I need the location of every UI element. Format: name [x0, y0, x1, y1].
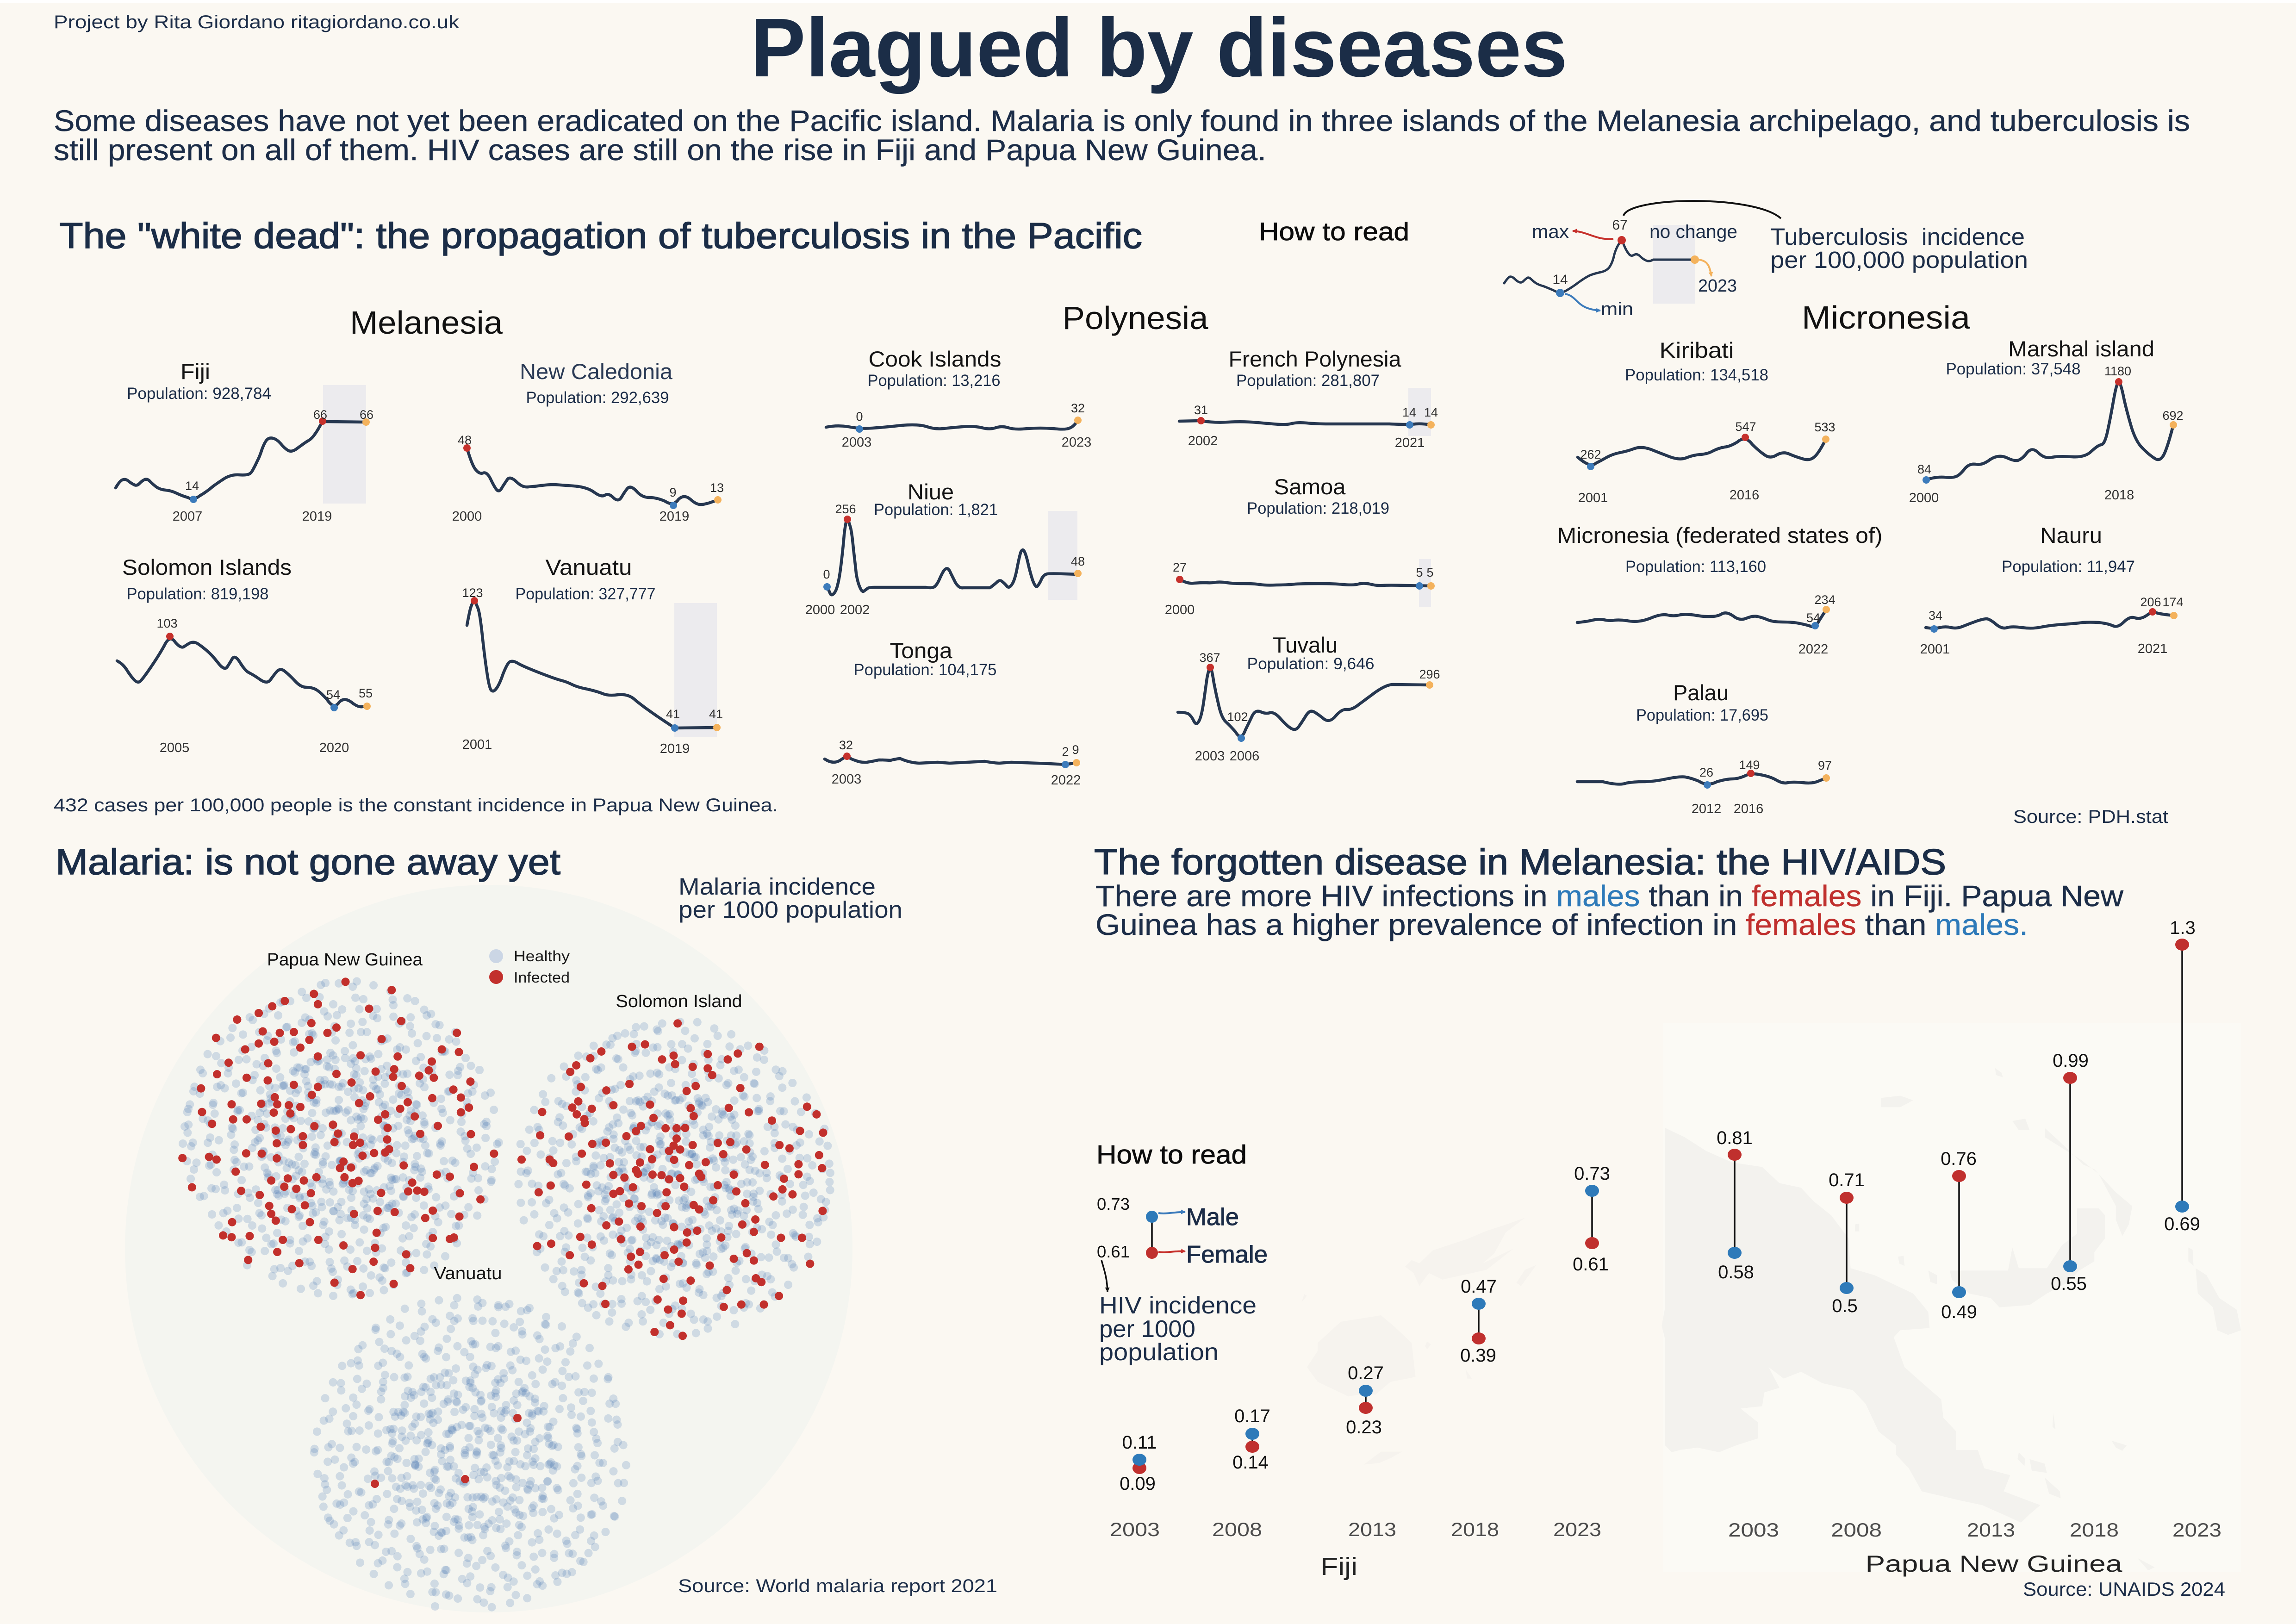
chart: Samoa: 27 [1173, 560, 1187, 574]
dot cluster: Solomon Island: Solomon Island [616, 992, 742, 1011]
note: Papua New Guinea incidence: 432 cases per 100,000 people is the constant incidence in Papua New Guinea. [54, 795, 778, 815]
chart: Papua New Guinea HIV incidence: 0.69 [2164, 1214, 2200, 1234]
chart: Nauru: Nauru [2040, 523, 2102, 548]
dot cluster: Vanuatu [250, 1231, 693, 1624]
chart: Fiji HIV incidence: 0.27 [1348, 1363, 1384, 1383]
chart: Marshal island: Marshal island [2008, 336, 2154, 361]
chart: Tuvalu: 296 [1419, 667, 1440, 681]
chart: Vanuatu: 2001 [462, 737, 492, 752]
chart: Fiji: Fiji [180, 359, 210, 384]
chart: Micronesia federated states: 234 [1814, 593, 1836, 607]
chart: New Caledonia [452, 359, 724, 524]
region heading: Polynesia: Polynesia [1063, 300, 1208, 336]
chart: Fiji HIV incidence: 0.47 [1461, 1276, 1497, 1297]
chart: Cook Islands [826, 347, 1091, 450]
chart: Fiji HIV incidence: 0.11 [1122, 1432, 1157, 1453]
tuberculosis unit note: Tuberculosis incidence [1770, 224, 2025, 250]
chart: Fiji HIV incidence: 0.39 [1460, 1345, 1496, 1366]
chart: Fiji HIV incidence: 0.14 [1232, 1452, 1269, 1473]
how to read HIV [1096, 1140, 1268, 1366]
chart: Palau [1577, 680, 1832, 816]
chart: Tonga: 2022 [1051, 773, 1081, 788]
chart: Vanuatu: Population: 327,777 [516, 585, 655, 603]
chart: Tonga: Tonga [890, 638, 952, 663]
how to read diagram: min [1601, 299, 1633, 319]
chart: Tonga: 2 [1062, 745, 1069, 759]
chart: Cook Islands: 32 [1071, 401, 1085, 415]
chart: Micronesia federated states: 54 [1806, 611, 1820, 625]
how to read diagram: max [1532, 222, 1569, 242]
chart: Tonga: 32 [839, 738, 853, 752]
HIV intro text: Guinea has a higher prevalence of infection in females than males. [1095, 908, 2028, 941]
chart: New Caledonia: Population: 292,639 [526, 389, 669, 407]
chart: Cook Islands: Population: 13,216 [867, 372, 1001, 390]
chart: Niue [805, 479, 1085, 617]
chart: Vanuatu: Vanuatu [545, 555, 632, 579]
chart: Samoa: 5 [1426, 566, 1434, 579]
chart: Fiji HIV incidence: 2003 [1110, 1518, 1160, 1540]
chart: Fiji: 2019 [302, 509, 332, 524]
chart: Solomon Islands: 55 [359, 686, 373, 700]
chart: Niue: 2002 [840, 603, 870, 617]
chart: Micronesia federated states: Micronesia (federated states of) [1557, 523, 1883, 548]
chart: Nauru [1920, 523, 2184, 657]
how to read HIV: Male [1186, 1204, 1239, 1231]
chart: Tonga: 9 [1072, 743, 1079, 757]
chart: Solomon Islands [117, 555, 373, 755]
how to read HIV: population [1099, 1339, 1219, 1366]
chart: Solomon Islands: Population: 819,198 [127, 585, 268, 603]
source: World malaria report: Source: World malaria report 2021 [678, 1576, 997, 1596]
chart: Papua New Guinea HIV incidence: 0.5 [1832, 1296, 1858, 1316]
chart: Papua New Guinea HIV incidence: 2003 [1728, 1519, 1779, 1541]
chart: Cook Islands: 2023 [1062, 435, 1091, 450]
region heading: Micronesia: Micronesia [1802, 299, 1970, 336]
chart: Papua New Guinea HIV incidence: 2008 [1831, 1519, 1882, 1541]
chart: Kiribati: Kiribati [1660, 338, 1734, 362]
region heading: Melanesia: Melanesia [350, 305, 503, 341]
chart: Nauru: 206 [2140, 595, 2161, 609]
chart: Solomon Islands: 54 [326, 688, 340, 702]
dot cluster: Papua New Guinea: Papua New Guinea [267, 950, 423, 970]
tuberculosis unit note [1770, 224, 2028, 273]
how to read diagram: 67 [1612, 218, 1628, 233]
how to read diagram [1504, 201, 1781, 319]
chart: Marshal island: 84 [1917, 462, 1931, 476]
chart: Kiribati: 2001 [1578, 491, 1608, 505]
chart: Vanuatu: 41 [709, 707, 723, 721]
chart: Papua New Guinea HIV incidence: 0.76 [1941, 1149, 1977, 1169]
chart: Tuvalu [1178, 633, 1440, 764]
how to read HIV: per 1000 [1099, 1316, 1195, 1343]
chart: Nauru: Population: 11,947 [2002, 558, 2135, 576]
dot cluster: Vanuatu: Vanuatu [434, 1264, 502, 1283]
chart: Papua New Guinea HIV incidence: 0.49 [1941, 1302, 1977, 1322]
chart: Marshal island: Population: 37,548 [1946, 360, 2081, 378]
chart: Fiji: 66 [360, 408, 373, 422]
chart: Micronesia federated states [1557, 523, 1883, 657]
chart: French Polynesia: 14 [1402, 405, 1416, 419]
chart: French Polynesia: French Polynesia [1228, 347, 1401, 371]
chart: Fiji: Population: 928,784 [127, 385, 271, 403]
chart: Palau: 149 [1739, 758, 1760, 772]
chart: New Caledonia: 2019 [660, 509, 689, 524]
HIV intro text [1095, 879, 2124, 941]
chart: Fiji HIV incidence: 2018 [1451, 1518, 1499, 1540]
dot cluster: Papua New Guinea [125, 924, 555, 1354]
chart: Samoa: 2000 [1165, 603, 1195, 617]
chart: French Polynesia: 31 [1194, 403, 1208, 417]
how to read HIV: How to read [1096, 1140, 1247, 1170]
chart: Vanuatu: 2019 [660, 741, 690, 756]
chart: French Polynesia: 2002 [1188, 434, 1218, 448]
chart: Vanuatu: 41 [666, 707, 680, 721]
chart: Tuvalu: 2003 [1195, 749, 1225, 764]
chart: French Polynesia [1179, 347, 1438, 450]
chart: Papua New Guinea HIV incidence [1717, 918, 2221, 1577]
how to read HIV: Female [1186, 1241, 1268, 1268]
chart: Kiribati: Population: 134,518 [1625, 366, 1768, 384]
how to read HIV: HIV incidence [1099, 1292, 1257, 1319]
chart: Tuvalu: 367 [1199, 651, 1220, 665]
chart: Cook Islands: 2003 [842, 435, 871, 450]
chart: Kiribati: 2016 [1730, 488, 1759, 503]
intro text [54, 104, 2190, 167]
malaria legend [489, 948, 570, 986]
how to read diagram: 14 [1552, 272, 1568, 287]
chart: Papua New Guinea HIV incidence: 0.55 [2051, 1274, 2087, 1294]
chart: Fiji [116, 359, 373, 524]
panel: HIV map backdrop [1663, 1023, 2241, 1572]
map: Fiji [1301, 1218, 1537, 1465]
chart: Cook Islands: Cook Islands [868, 347, 1002, 371]
panel: malaria background circle [125, 885, 852, 1612]
chart: Papua New Guinea HIV incidence: 2018 [2070, 1519, 2119, 1541]
chart: Papua New Guinea HIV incidence: 0.99 [2053, 1051, 2089, 1071]
chart: New Caledonia: 13 [710, 481, 724, 495]
chart: Solomon Islands: 103 [156, 616, 178, 630]
chart: Fiji HIV incidence: 2013 [1348, 1518, 1396, 1540]
chart: Tuvalu: 2006 [1230, 749, 1259, 764]
heading: HIV: The forgotten disease in Melanesia: the HIV/AIDS [1094, 841, 1946, 882]
chart: Kiribati: 533 [1814, 420, 1836, 434]
chart: Fiji HIV incidence: 0.17 [1234, 1406, 1270, 1426]
dot cluster: Solomon Island [451, 957, 894, 1400]
intro text: still present on all of them. HIV cases are still on the rise in Fiji and Papua New Guinea. [54, 133, 1266, 167]
chart: French Polynesia: 2021 [1395, 436, 1425, 450]
chart: Niue: 256 [835, 502, 856, 516]
chart: Tonga [825, 638, 1081, 788]
chart: Fiji: 66 [313, 408, 327, 422]
chart: French Polynesia: 14 [1424, 405, 1438, 419]
chart: French Polynesia: Population: 281,807 [1236, 372, 1380, 390]
chart: Niue: 2000 [805, 603, 835, 617]
chart: Niue: 0 [823, 567, 830, 581]
malaria unit note: Malaria incidence [678, 873, 876, 900]
chart: Tuvalu: Population: 9,646 [1247, 655, 1375, 673]
chart: Micronesia federated states: Population: 113,160 [1625, 558, 1766, 576]
how to read HIV: 0.73 [1097, 1195, 1130, 1213]
chart: Niue: Population: 1,821 [874, 501, 998, 519]
chart: Marshal island: 692 [2162, 409, 2184, 423]
chart: Marshal island: 2000 [1909, 491, 1939, 505]
chart: Papua New Guinea HIV incidence: 1.3 [2170, 918, 2196, 938]
chart: Marshal island: 1180 [2104, 364, 2131, 378]
chart: Fiji HIV incidence: Fiji [1320, 1553, 1357, 1580]
chart: Niue: Niue [908, 479, 954, 504]
chart: Palau: Palau [1673, 680, 1729, 705]
chart: Tonga: Population: 104,175 [853, 661, 997, 679]
chart: Kiribati: 547 [1735, 420, 1756, 434]
chart: Papua New Guinea HIV incidence: 2013 [1967, 1519, 2015, 1541]
chart: Marshal island [1909, 336, 2184, 505]
chart: Nauru: 174 [2162, 595, 2184, 609]
chart: Nauru: 34 [1929, 609, 1942, 622]
HIV intro text: There are more HIV infections in males than in females in Fiji. Papua New [1095, 879, 2124, 913]
chart: Samoa [1165, 474, 1435, 617]
source: UNAIDS: Source: UNAIDS 2024 [2023, 1578, 2225, 1600]
source: PDH.stat: Source: PDH.stat [2013, 807, 2168, 827]
title: Plagued by diseases [750, 1, 1568, 94]
chart: Samoa: Population: 218,019 [1247, 499, 1389, 517]
chart: Vanuatu: 123 [462, 586, 483, 600]
heading: malaria: Malaria: is not gone away yet [56, 841, 560, 882]
chart: Fiji HIV incidence: 2023 [1553, 1518, 1601, 1540]
chart: Fiji: 2007 [173, 509, 202, 524]
chart: Nauru: 2001 [1920, 642, 1950, 657]
chart: Fiji HIV incidence: 0.61 [1573, 1254, 1609, 1275]
chart: Fiji HIV incidence: 2008 [1212, 1518, 1262, 1540]
heading: tuberculosis: The "white dead": the propagation of tuberculosis in the Pacific [59, 215, 1142, 256]
chart: Papua New Guinea HIV incidence: 0.71 [1829, 1170, 1865, 1190]
malaria legend: Healthy [514, 948, 570, 964]
chart: New Caledonia: 9 [669, 485, 677, 499]
chart: Kiribati: 262 [1580, 448, 1601, 461]
chart: Tonga: 2003 [832, 772, 861, 787]
chart: Niue: 48 [1071, 554, 1085, 568]
chart: Samoa: Samoa [1274, 474, 1346, 499]
malaria unit note [678, 873, 902, 923]
chart: Samoa: 5 [1416, 566, 1423, 579]
chart: Palau: 97 [1818, 759, 1832, 772]
chart: Fiji: 14 [185, 479, 199, 493]
chart: New Caledonia: 2000 [452, 509, 482, 524]
chart: Solomon Islands: Solomon Islands [122, 555, 292, 579]
chart: Fiji HIV incidence: 0.73 [1574, 1164, 1610, 1184]
chart: Solomon Islands: 2020 [319, 740, 349, 755]
chart: Fiji HIV incidence: 0.09 [1120, 1474, 1156, 1494]
chart: Palau: 2012 [1692, 802, 1721, 816]
chart: Vanuatu [462, 555, 723, 756]
chart: Palau: 26 [1699, 765, 1713, 779]
chart: Palau: 2016 [1734, 802, 1763, 816]
heading: how to read tuberculosis: How to read [1259, 217, 1409, 246]
chart: Papua New Guinea HIV incidence: Papua New Guinea [1865, 1551, 2122, 1577]
chart: Fiji HIV incidence: 0.23 [1346, 1417, 1382, 1437]
chart: Kiribati [1578, 338, 1836, 505]
chart: Solomon Islands: 2005 [160, 740, 189, 755]
intro text: Some diseases have not yet been eradicated on the Pacific island. Malaria is only found in three islands of the Melanesia archipelago, and tuberculosis is [54, 104, 2190, 137]
chart: Papua New Guinea HIV incidence: 0.58 [1718, 1262, 1754, 1282]
tuberculosis unit note: per 100,000 population [1770, 247, 2028, 273]
how to read diagram: 2023 [1698, 276, 1737, 296]
chart: Fiji HIV incidence [1110, 1164, 1610, 1580]
chart: Papua New Guinea HIV incidence: 0.81 [1717, 1128, 1753, 1148]
credit line: Project by Rita Giordano ritagiordano.co.uk [54, 12, 460, 32]
chart: Tuvalu: 102 [1227, 710, 1248, 724]
chart: New Caledonia: New Caledonia [520, 359, 673, 384]
chart: Nauru: 2021 [2138, 641, 2167, 656]
chart: Micronesia federated states: 2022 [1798, 642, 1828, 657]
chart: Papua New Guinea HIV incidence: 2023 [2172, 1519, 2221, 1541]
how to read diagram: no change [1649, 222, 1737, 242]
chart: Palau: Population: 17,695 [1636, 706, 1768, 724]
chart: Cook Islands: 0 [856, 410, 863, 423]
map: Papua New Guinea [1661, 1068, 2241, 1570]
chart: Tuvalu: Tuvalu [1273, 633, 1338, 657]
chart: New Caledonia: 48 [458, 433, 472, 447]
malaria unit note: per 1000 population [678, 896, 902, 923]
chart: Marshal island: 2018 [2104, 488, 2134, 503]
malaria legend: Infected [514, 969, 570, 986]
how to read HIV: 0.61 [1097, 1242, 1130, 1261]
